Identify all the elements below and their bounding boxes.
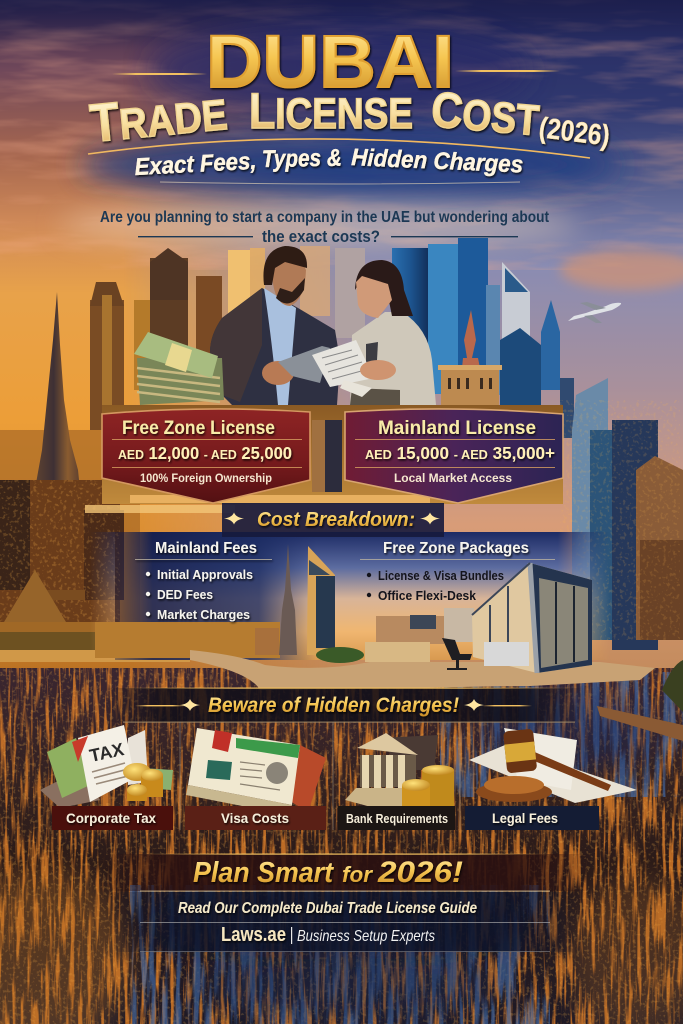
label: legal fees: Legal Fees xyxy=(492,810,558,826)
man suit xyxy=(210,288,340,405)
label: corporate tax: Corporate Tax xyxy=(66,810,156,826)
title: Trade License Cost xyxy=(87,81,612,154)
subtitle: Types & xyxy=(262,145,342,173)
skyline: right blue towers xyxy=(300,238,683,650)
column dividers xyxy=(180,722,460,830)
man head xyxy=(272,258,306,306)
background sky xyxy=(0,0,683,700)
free zone packages list xyxy=(360,540,555,603)
hidden charges header xyxy=(105,688,585,723)
mainland fees list xyxy=(135,540,272,622)
shrubs xyxy=(316,647,364,663)
free zone heading: Free Zone License xyxy=(122,417,275,439)
plan smart banner: 2026! xyxy=(377,856,463,889)
free zone packages list: Free Zone Packages xyxy=(383,540,529,557)
label: corporate tax xyxy=(52,806,173,830)
right shrub xyxy=(662,660,683,712)
panel: cost breakdown xyxy=(90,503,655,690)
call to action xyxy=(100,854,590,952)
label: legal fees xyxy=(465,806,599,830)
gold shoreline city xyxy=(95,622,280,658)
ground and shore xyxy=(190,650,655,690)
mainland benefit: Local Market Access xyxy=(394,471,512,485)
intro question: Are you planning to start a company in the UAE but wondering about xyxy=(100,209,549,226)
icon: tax papers and coins: TAX xyxy=(88,739,126,766)
panel: hidden charges xyxy=(40,688,637,830)
mainland fees list: Mainland Fees xyxy=(155,540,257,557)
title: Trade License Cost: LICENSE xyxy=(249,83,413,139)
brand line: Laws.ae xyxy=(221,924,286,946)
low buildings xyxy=(365,608,474,662)
read guide line: Read Our Complete Dubai Trade License Guide xyxy=(178,900,477,917)
intro question: the exact costs? xyxy=(262,228,380,246)
section header: Cost Breakdown: xyxy=(257,509,415,531)
brand line: Business Setup Experts xyxy=(297,928,435,945)
icon: visa booklet xyxy=(186,728,326,815)
section header xyxy=(222,503,444,537)
skyline: left gold towers xyxy=(0,248,265,650)
title: Trade License Cost: (2026) xyxy=(537,112,612,153)
free zone price: AED 12,000 - AED 25,000 xyxy=(118,443,292,463)
subtitle: Exact Fees, xyxy=(134,148,257,181)
free zone packages list: Office Flexi-Desk xyxy=(378,588,477,603)
man hand xyxy=(262,361,294,385)
glass office xyxy=(472,563,592,673)
documents xyxy=(278,346,330,383)
twin towers scene xyxy=(255,544,335,655)
businessman and businesswoman xyxy=(134,246,436,405)
subtitle: Hidden Charges xyxy=(351,144,524,178)
intro question xyxy=(100,209,549,246)
left city horizon xyxy=(0,480,235,662)
man shirt xyxy=(264,288,296,405)
read guide line xyxy=(110,892,580,952)
money stack xyxy=(134,332,224,405)
plan smart banner: for xyxy=(342,862,373,887)
mainland fees list: DED Fees xyxy=(157,587,213,602)
title: Trade License Cost: COST xyxy=(429,81,542,146)
airplane xyxy=(568,302,621,323)
woman jacket xyxy=(350,312,436,405)
plan smart banner: Plan Smart xyxy=(193,857,334,889)
mainland fees list: Initial Approvals xyxy=(157,567,253,582)
office chair xyxy=(442,638,472,670)
clock tower landmark xyxy=(438,310,502,405)
label: visa costs xyxy=(185,806,326,830)
scene backdrop xyxy=(90,532,610,660)
plan smart banner xyxy=(100,854,590,892)
water reflections xyxy=(0,660,683,1024)
title: Dubai: DUBAI xyxy=(206,20,454,103)
panel: mainland license xyxy=(345,409,563,503)
panel: free zone license xyxy=(102,409,310,503)
label: bank requirements: Bank Requirements xyxy=(346,812,448,826)
free zone packages list: License & Visa Bundles xyxy=(378,568,504,583)
icon: gavel xyxy=(469,728,637,803)
icon: bank building and coins xyxy=(345,733,454,820)
woman face xyxy=(356,276,392,318)
label: visa costs: Visa Costs xyxy=(221,810,289,826)
title: Trade License Cost: TRADE xyxy=(87,81,230,154)
label: bank requirements xyxy=(338,806,455,830)
title block xyxy=(87,20,612,184)
subtitle xyxy=(134,144,524,181)
landmark tower xyxy=(28,292,85,590)
mainland price: AED 15,000 - AED 35,000+ xyxy=(365,443,555,463)
mainland heading: Mainland License xyxy=(378,417,536,439)
woman hair xyxy=(355,260,413,316)
decorative gold rules xyxy=(88,70,590,184)
center strip between license panels xyxy=(102,405,563,504)
pier xyxy=(597,706,683,741)
hidden charges header: Beware of Hidden Charges! xyxy=(208,694,459,717)
free zone benefit: 100% Foreign Ownership xyxy=(140,471,272,485)
brand line xyxy=(140,924,550,952)
icon: tax papers and coins xyxy=(40,725,173,808)
mainland fees list: Market Charges xyxy=(157,607,250,622)
